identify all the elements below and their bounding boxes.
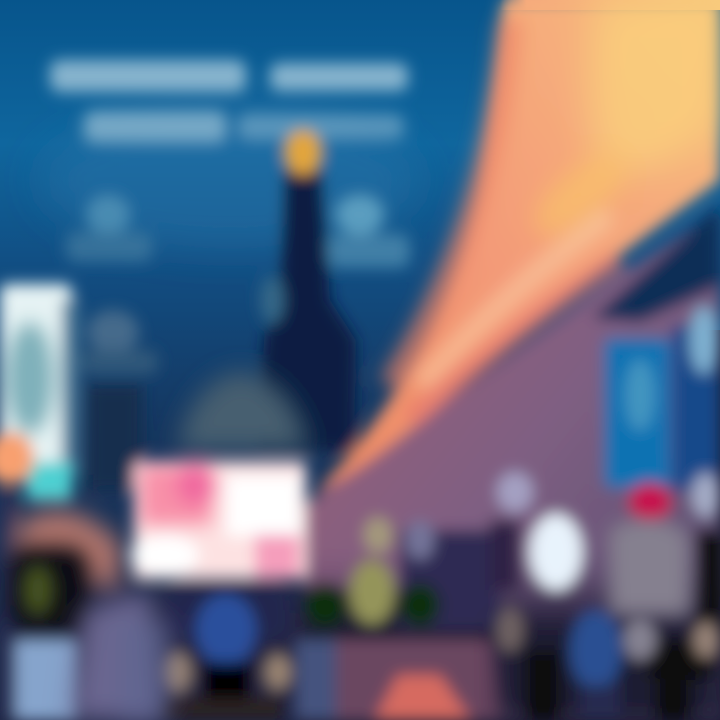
right crowd <box>490 472 720 720</box>
lower left scene <box>0 490 160 720</box>
orange awning <box>16 510 122 590</box>
dark crowd mass <box>500 620 720 720</box>
dark figure coat <box>645 640 715 680</box>
left shrub <box>305 583 345 627</box>
tan figure <box>497 608 523 652</box>
right pale head <box>692 473 720 517</box>
red hat <box>629 483 671 521</box>
right shrub <box>400 583 440 627</box>
far right dark figure <box>696 530 720 640</box>
dark legs right <box>655 670 691 720</box>
dark figure behind <box>490 520 520 590</box>
right info icon group <box>328 195 410 268</box>
panel side strip <box>62 300 78 475</box>
bright white figure <box>530 514 582 590</box>
flame hot core <box>522 141 638 249</box>
purple backing <box>400 530 500 630</box>
billboard lower pink <box>255 535 299 577</box>
blue billboards right <box>604 306 720 490</box>
flame left coral edge <box>390 20 510 385</box>
tan hand far right <box>694 622 718 658</box>
coral reflection <box>375 675 470 720</box>
wall and floor edge underlay <box>300 330 720 720</box>
figure head <box>364 517 392 553</box>
pale head <box>497 472 533 512</box>
flame pink streak <box>410 260 620 420</box>
flame edge underlay <box>500 0 720 10</box>
billboard white panel <box>226 476 300 536</box>
left hand <box>165 652 191 692</box>
orange blob <box>0 432 34 484</box>
right hand <box>265 654 291 690</box>
side mauve column <box>120 620 170 720</box>
flame highlight <box>589 0 720 173</box>
lower dark ground <box>162 698 282 720</box>
blue reflection left <box>296 640 336 720</box>
billboard magenta accent <box>177 465 213 505</box>
mid buildings <box>88 276 308 490</box>
sky haze <box>40 110 420 250</box>
floor reflection <box>296 640 500 720</box>
dark shopfront <box>8 545 90 633</box>
grey hand <box>624 620 656 660</box>
billboard lower white <box>131 535 199 575</box>
black legs <box>204 662 250 720</box>
title text bars <box>50 60 408 142</box>
flame swoosh <box>316 0 720 492</box>
dark legs <box>525 650 561 720</box>
grey head <box>406 520 434 560</box>
dark awning right <box>592 205 720 322</box>
dark left edge <box>0 490 16 720</box>
pale blue column <box>16 640 76 720</box>
lower dark floor band <box>0 590 720 720</box>
central bright billboard <box>131 462 306 578</box>
central plants group <box>305 517 500 645</box>
billboard pink panel <box>140 465 212 525</box>
left info icon group <box>66 195 158 374</box>
tower glowing tip <box>284 129 322 175</box>
olive figure <box>350 560 394 624</box>
blue person <box>570 610 622 690</box>
tower <box>258 129 356 450</box>
panel teal base <box>26 462 72 500</box>
panel teal core <box>6 322 54 434</box>
olive figure <box>24 564 52 616</box>
blue torso <box>196 594 256 666</box>
central blue figure <box>162 582 291 720</box>
flame pale streak <box>420 215 610 385</box>
building wall right <box>305 210 720 720</box>
left white phone panel <box>0 284 78 500</box>
mauve column <box>70 590 160 720</box>
tower spire <box>258 170 356 450</box>
grey person <box>610 519 690 615</box>
blue legs <box>580 685 620 720</box>
